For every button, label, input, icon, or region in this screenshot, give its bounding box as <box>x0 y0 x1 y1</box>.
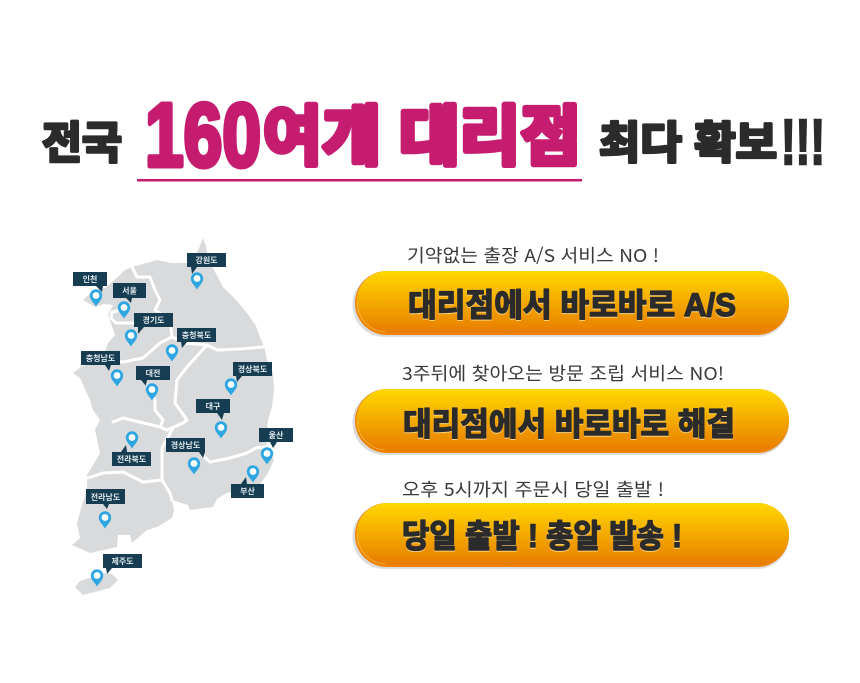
button 3 <box>352 503 789 569</box>
title underline <box>137 179 582 182</box>
region names: 서울 <box>122 286 137 296</box>
service row 2 <box>352 360 789 455</box>
region names: 대전 <box>146 368 160 378</box>
region names: 경기도 <box>142 315 165 325</box>
title: exclamation marks: !!! <box>781 106 825 178</box>
pin: 충청북도 <box>166 344 178 362</box>
region names: 충청남도 <box>86 353 116 363</box>
pin: 전라남도 <box>99 511 111 528</box>
button 2: 대리점에서 바로바로 해결 <box>403 406 735 442</box>
region names: 경상남도 <box>171 440 201 450</box>
region names: 충청북도 <box>182 330 212 340</box>
button 1 <box>352 271 789 337</box>
pin: 대구 <box>215 421 227 438</box>
region borders <box>88 267 265 500</box>
title: 전국: 전국 <box>42 119 122 168</box>
pins <box>90 272 273 586</box>
region names: 전라남도 <box>91 492 121 502</box>
region names: 제주도 <box>111 556 134 566</box>
caption 3: 오후 5시까지 주문시 당일 출발 ! <box>402 476 664 502</box>
region names: 울산 <box>269 430 284 440</box>
region names: 대구 <box>206 401 221 411</box>
region names: 강원도 <box>195 255 218 265</box>
region names <box>83 255 284 566</box>
region names: 부산 <box>240 486 255 496</box>
pin: 전라북도 <box>126 431 138 448</box>
title <box>42 86 825 186</box>
button 2 <box>352 389 789 455</box>
pin: 제주도 <box>91 569 103 586</box>
pin: 울산 <box>261 447 273 464</box>
title: 160: 160 <box>145 86 261 186</box>
pin: 경상북도 <box>225 378 237 396</box>
region names: 전라북도 <box>117 454 147 464</box>
pin: 충청남도 <box>111 369 123 386</box>
title: 최다 확보: 최다 확보 <box>599 119 777 168</box>
label boxes <box>73 253 293 574</box>
pin: 경기도 <box>125 329 137 346</box>
service row 3 <box>352 476 789 569</box>
mainland silhouette <box>72 238 274 553</box>
caption 1: 기약없는 출장 A/S 서비스 NO ! <box>407 242 659 268</box>
map of Korea <box>72 238 293 595</box>
button 3: 당일 출발 ! 총알 발송 ! <box>402 518 682 554</box>
region names: 인천 <box>83 274 97 284</box>
pin: 강원도 <box>191 272 203 290</box>
Jeju island <box>75 573 118 595</box>
pin: 경상남도 <box>188 457 200 474</box>
pin: 인천 <box>90 289 102 306</box>
pin: 부산 <box>247 465 259 482</box>
pin: 대전 <box>146 383 158 400</box>
button 1: 대리점에서 바로바로 A/S <box>408 287 736 323</box>
service row 1 <box>352 242 789 337</box>
pin centres <box>93 275 270 579</box>
caption 2: 3주뒤에 찾아오는 방문 조립 서비스 NO! <box>402 360 724 386</box>
region names: 경상북도 <box>238 364 268 374</box>
title: 여개: 여개 <box>263 100 381 173</box>
title: 대리점: 대리점 <box>399 100 581 173</box>
pin: 서울 <box>118 301 130 318</box>
